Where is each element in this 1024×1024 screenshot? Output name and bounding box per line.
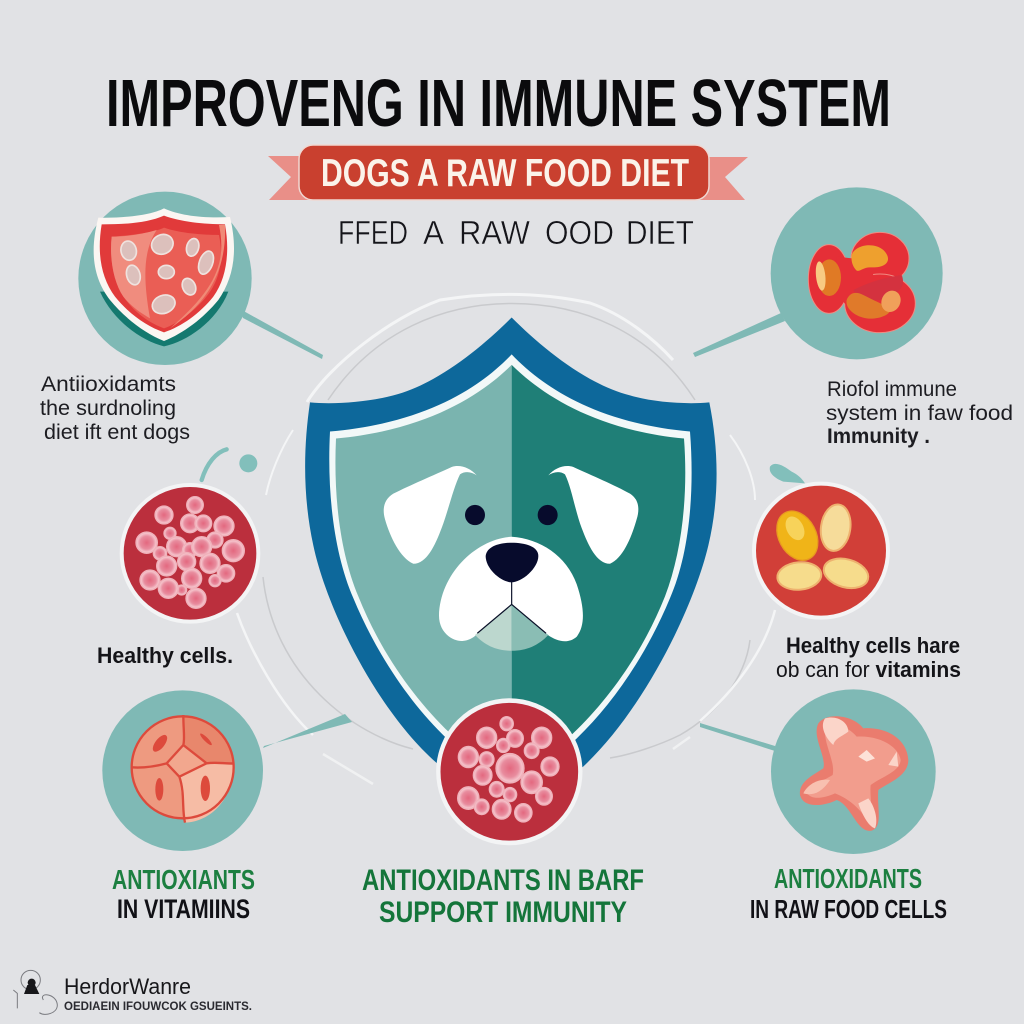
footer brand text — [64, 974, 252, 1013]
icon: left red cells circle — [122, 449, 258, 622]
dog chin — [475, 581, 548, 651]
subtitle: RAW — [459, 214, 531, 251]
dog nose — [486, 543, 538, 582]
label: antioxidants in BARF — [362, 864, 644, 929]
text: top-left caption: diet ift ent dogs — [44, 421, 190, 444]
shield white inner outline — [329, 354, 692, 798]
icon: right vitamin capsules circle — [754, 464, 888, 618]
subtitle: FFED — [338, 214, 408, 251]
text: healthy cells right — [776, 633, 961, 682]
ribbon banner — [268, 145, 748, 200]
subtitle: DIET — [626, 214, 694, 251]
text: top-left caption: the surdnoling — [40, 397, 176, 420]
dog muzzle — [439, 537, 583, 641]
label: antioxidants in vitamins: IN VITAMIINS — [117, 894, 250, 924]
label: antioxidants in vitamins — [112, 864, 255, 924]
subtitle: OOD — [545, 214, 614, 251]
label: antioxidants in raw food cells — [750, 863, 947, 924]
central shield with dog face — [305, 318, 717, 819]
orbit arcs around central shield — [237, 294, 775, 784]
label: antioxidants in raw food cells: IN RAW FOOD CELLS — [750, 894, 947, 924]
icon: top-left shield with spots — [78, 192, 252, 365]
label: antioxidants in raw food cells: ANTIOXIDANTS — [774, 863, 922, 894]
dog left ear — [384, 466, 477, 564]
shield outer blue frame — [305, 318, 717, 819]
icon: top-right red blood cells — [771, 187, 943, 359]
icon: bottom-left tissue cells — [102, 690, 263, 851]
label: antioxidants in vitamins: ANTIOXIANTS — [112, 864, 255, 895]
subtitle — [338, 214, 694, 251]
footer logo icon — [13, 970, 57, 1014]
ribbon banner: DOGS A RAW FOOD DIET — [321, 152, 689, 195]
central red cells badge — [438, 701, 580, 843]
icon: bottom-right raw meat — [771, 689, 936, 854]
label: antioxidants in BARF: ANTIOXIDANTS IN BARF — [362, 864, 644, 897]
shield dark teal half — [512, 365, 685, 791]
text: top-right caption: Immunity . — [827, 425, 930, 448]
footer brand text: HerdorWanre — [64, 974, 191, 999]
text: top-left caption: Antiioxidamts — [41, 373, 176, 396]
label: antioxidants in BARF: SUPPORT IMMUNITY — [379, 896, 627, 929]
text: top-right caption: system in faw food — [826, 402, 1013, 425]
dog eyes — [465, 505, 558, 525]
dog right ear — [548, 466, 638, 564]
text: top-right caption: Riofol immune — [827, 378, 957, 401]
shield light teal half — [335, 365, 512, 791]
subtitle: A — [423, 214, 444, 251]
text: healthy cells right: ob can for vitamins — [776, 657, 961, 682]
text: healthy cells left: Healthy cells. — [97, 643, 233, 668]
text: top-right caption — [826, 378, 1013, 448]
connector lines — [240, 309, 785, 751]
footer brand text: OEDIAEIN IFOUWCOK GSUEINTS. — [64, 999, 252, 1013]
text: healthy cells right: Healthy cells hare — [786, 633, 960, 658]
text: top-left caption — [40, 373, 190, 444]
